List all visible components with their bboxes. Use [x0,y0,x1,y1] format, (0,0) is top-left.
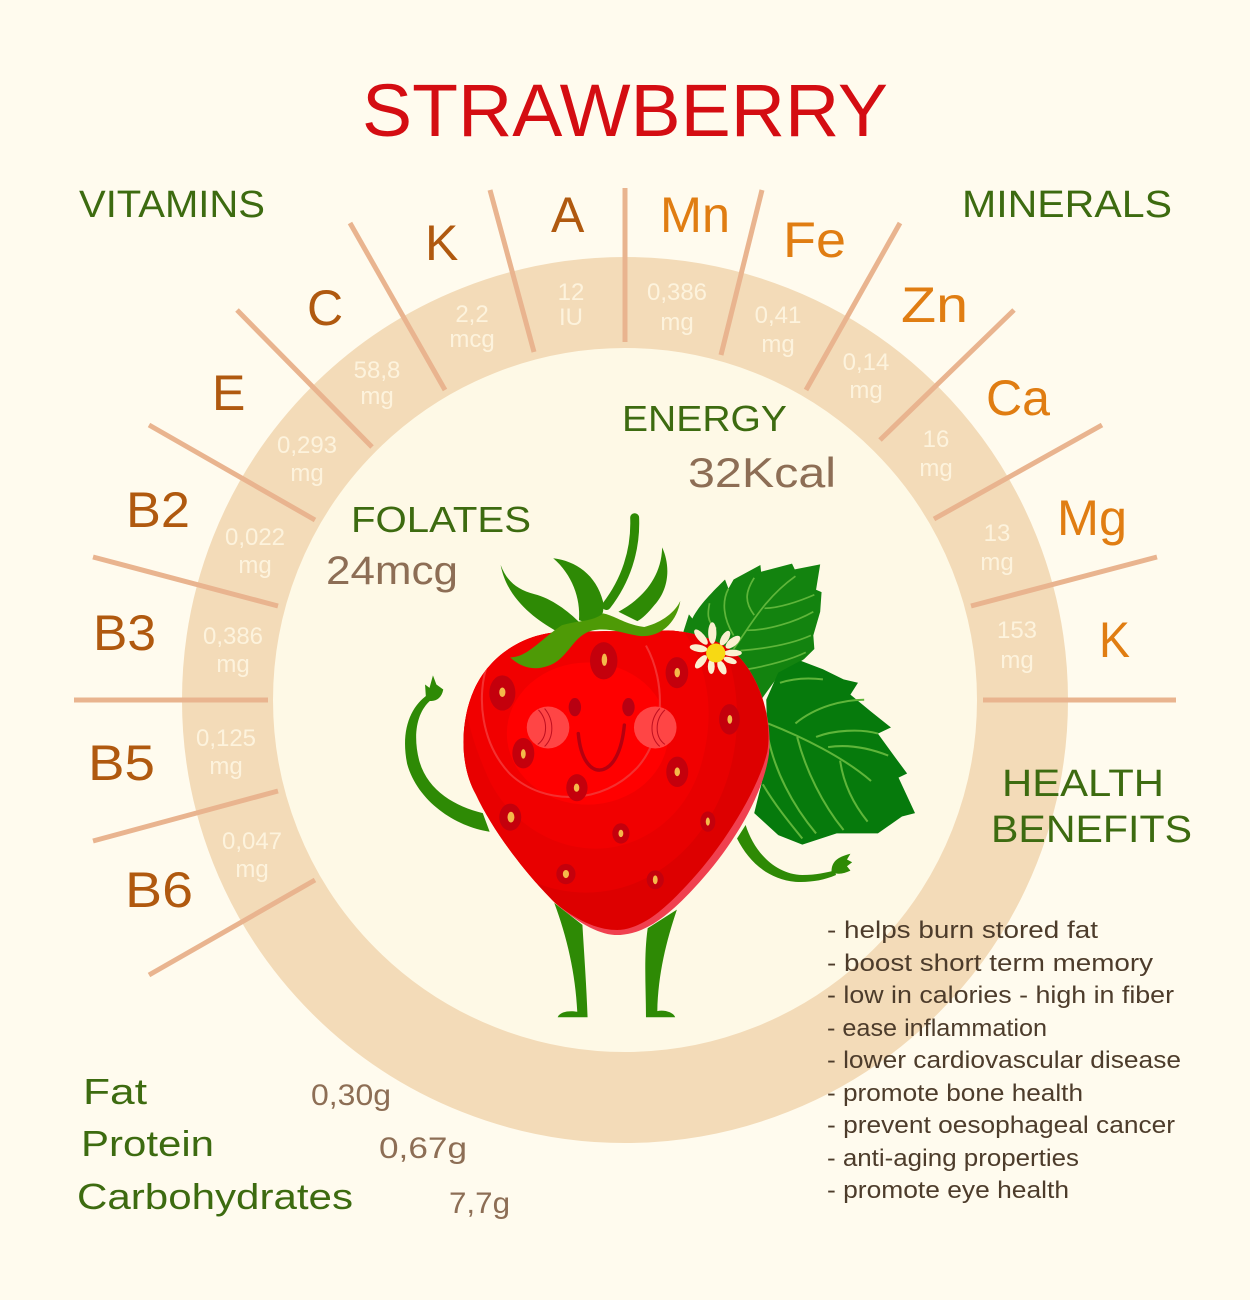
vitamin amounts: 0,293 [277,432,337,459]
vitamin amounts: 2,2 [455,301,489,328]
health benefits list: - prevent oesophageal cancer [827,1112,1175,1139]
calyx [510,601,680,668]
vitamin amounts: mg [238,552,272,579]
mineral amounts: mg [980,549,1014,576]
health benefits list: - helps burn stored fat [827,917,1098,944]
spoke dividers [74,188,1176,975]
macronutrients: 0,67g [379,1132,467,1165]
mineral amounts [647,279,1037,674]
vitamin labels: B5 [88,735,155,791]
folates [326,499,531,593]
health benefits list: - promote eye health [827,1177,1069,1204]
berry body [463,630,770,935]
vitamin amounts: 0,386 [203,623,263,650]
heading: health benefits: HEALTH [1002,763,1164,805]
stem and sepals [501,518,667,630]
mineral amounts: 153 [997,617,1037,644]
folates: 24mcg [326,549,458,593]
energy: ENERGY [622,398,787,439]
vitamin amounts: 0,125 [196,725,256,752]
health benefits list: - lower cardiovascular disease [827,1047,1181,1074]
mineral labels: Zn [901,277,968,333]
mineral amounts: mg [761,331,795,358]
mineral labels: K [1099,612,1130,668]
health benefits list: - ease inflammation [827,1015,1047,1042]
heading: health benefits [991,763,1192,851]
vitamin labels: C [307,280,343,336]
vitamin amounts: 0,047 [222,828,282,855]
strawberry character [405,518,915,1017]
vitamin labels: B6 [125,862,193,918]
mineral labels: Fe [783,212,846,268]
mineral labels: Mg [1057,490,1127,546]
macronutrients [77,1071,510,1220]
energy: 32Kcal [688,449,836,496]
health benefits list: - anti-aging properties [827,1145,1079,1172]
mineral amounts: 0,14 [843,349,889,376]
health benefits list: - promote bone health [827,1080,1083,1107]
health benefits list: - low in calories - high in fiber [827,982,1174,1009]
vitamin amounts: 0,022 [225,524,285,551]
heading: health benefits: BENEFITS [991,809,1192,851]
seeds [489,642,740,889]
vitamin amounts: mg [216,651,250,678]
mineral amounts: 13 [984,520,1010,547]
back leaves [683,564,915,845]
heading: vitamins: VITAMINS [79,184,265,226]
vitamin amounts: mg [209,753,243,780]
vitamin amounts: mg [360,383,394,410]
heading: minerals: MINERALS [962,184,1172,226]
arms and legs [405,675,852,1017]
mineral amounts: mg [849,377,883,404]
vitamin amounts: 58,8 [354,357,400,384]
mineral amounts: mg [1000,647,1034,674]
mineral amounts: 16 [923,426,949,453]
macronutrients: Carbohydrates [77,1176,353,1217]
mineral labels [660,187,1130,668]
vitamin amounts: IU [559,304,583,331]
vitamin amounts: 12 [558,279,584,306]
macronutrients: Fat [83,1071,147,1112]
mineral amounts: mg [660,309,694,336]
vitamin amounts: mg [235,856,269,883]
vitamin labels: B3 [93,605,156,661]
mineral amounts: mg [919,455,953,482]
vitamin labels [88,187,585,918]
health benefits list: - boost short term memory [827,950,1153,977]
vitamin amounts: mg [290,460,324,487]
vitamin amounts [196,279,584,883]
mineral labels: Mn [660,187,730,243]
macronutrients: 0,30g [311,1079,391,1112]
mineral amounts: 0,41 [755,302,801,329]
vitamin labels: K [425,215,458,271]
mineral amounts: 0,386 [647,279,707,306]
nutrient ring [228,302,1022,1098]
health benefits list [827,917,1181,1204]
energy [622,398,836,496]
vitamin amounts: mcg [449,326,495,353]
macronutrients: Protein [81,1123,214,1164]
vitamin labels: B2 [126,482,190,538]
vitamin labels: E [212,365,245,421]
folates: FOLATES [351,499,531,540]
macronutrients: 7,7g [449,1187,510,1220]
flower [689,622,742,676]
title: STRAWBERRY [362,69,888,152]
face [527,698,677,770]
vitamin labels: A [551,187,585,243]
mineral labels: Ca [986,370,1050,426]
